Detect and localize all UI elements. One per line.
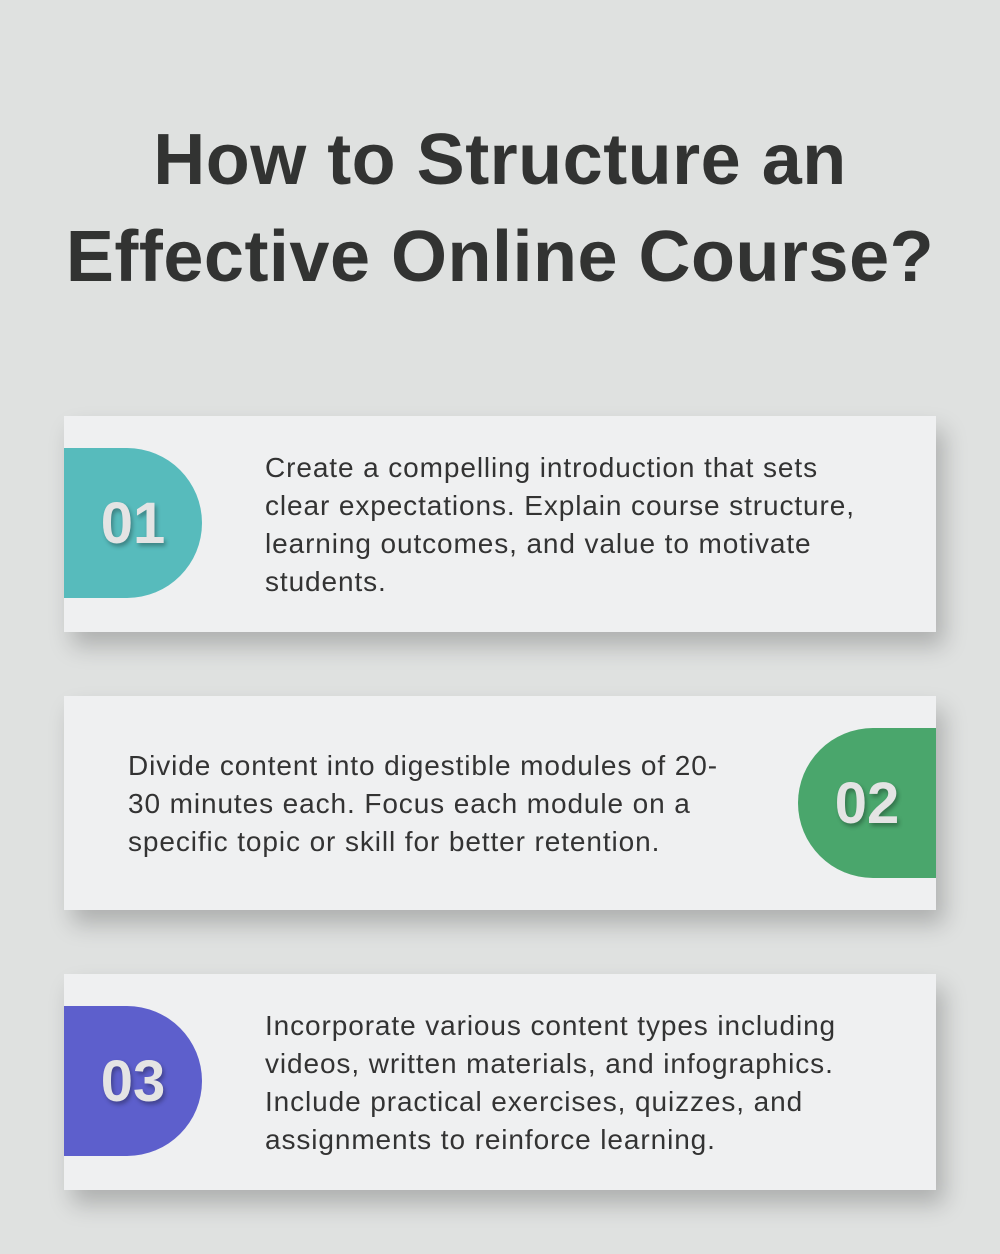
badge 01 <box>64 448 202 598</box>
text 1: clear expectations. Explain course structure, <box>265 490 855 521</box>
badge 03 <box>64 1006 202 1156</box>
text 1 <box>265 452 855 597</box>
text 2: specific topic or skill for better retention. <box>128 826 660 857</box>
title: Effective Online Course? <box>66 217 934 297</box>
text 3: assignments to reinforce learning. <box>265 1124 716 1155</box>
card 2 <box>64 696 936 910</box>
title <box>66 120 934 297</box>
card 3 <box>64 974 936 1190</box>
text 1: Create a compelling introduction that sets <box>265 452 818 483</box>
text 3: videos, written materials, and infographics. <box>265 1048 834 1079</box>
text 2: Divide content into digestible modules of 20- <box>128 750 718 781</box>
text 3 <box>265 1010 836 1155</box>
text 2: 30 minutes each. Focus each module on a <box>128 788 691 819</box>
text 3: Include practical exercises, quizzes, and <box>265 1086 803 1117</box>
text 3: Incorporate various content types including <box>265 1010 836 1041</box>
text 1: students. <box>265 566 387 597</box>
text 2 <box>128 750 718 857</box>
badge 02 <box>798 728 936 878</box>
title: How to Structure an <box>153 120 847 200</box>
badge 02: 02 <box>835 770 899 836</box>
badge 03: 03 <box>101 1048 165 1114</box>
text 1: learning outcomes, and value to motivate <box>265 528 812 559</box>
badge 01: 01 <box>101 490 165 556</box>
card 1 <box>64 416 936 632</box>
